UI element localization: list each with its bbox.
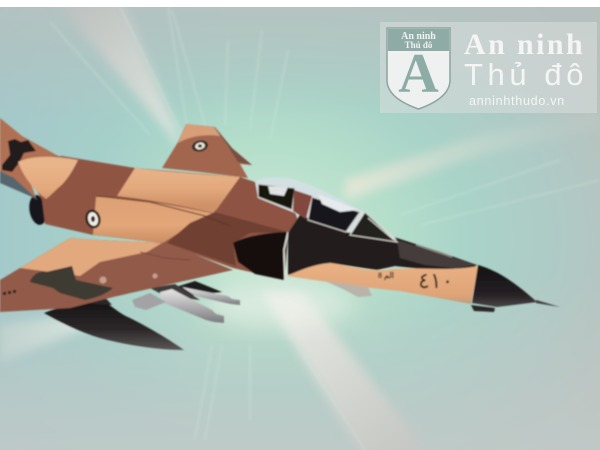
fuselage base silhouette xyxy=(20,156,300,280)
upper fuselage tan xyxy=(117,168,245,213)
logo wordmark: Thủ đô xyxy=(464,57,588,92)
logo shield: A xyxy=(398,43,439,105)
under nose fairing xyxy=(325,281,372,297)
tail fin xyxy=(0,118,65,200)
nose markings: ٤١٠ xyxy=(418,268,453,293)
drop tank under wing xyxy=(44,299,184,350)
dark intake xyxy=(233,232,288,280)
spine marking xyxy=(416,245,452,257)
logo wordmark: An ninh xyxy=(464,28,585,61)
intake lip xyxy=(284,232,288,280)
logo wordmark: anninhthudo.vn xyxy=(469,94,565,108)
canopy xyxy=(255,177,397,242)
brown upper band behind canopy xyxy=(217,177,300,234)
logo shield xyxy=(387,28,450,109)
fuselage panel line xyxy=(97,196,230,226)
logo shield: An ninh xyxy=(401,31,436,42)
rear fuselage tan xyxy=(18,157,78,199)
nose markings: 8 الم xyxy=(378,271,394,281)
lower nose tan xyxy=(287,263,478,304)
brown mid fuselage xyxy=(167,212,288,266)
wing xyxy=(0,238,233,312)
logo shield: Thủ đô xyxy=(405,40,433,50)
radome xyxy=(472,265,537,307)
logo: An ninh Thủ đô watermark panel xyxy=(380,22,597,113)
engine nozzle xyxy=(27,194,49,226)
vertical stabilizer xyxy=(162,124,252,178)
missiles under wing xyxy=(74,281,240,323)
nose markings xyxy=(378,268,453,293)
forward fuselage dark xyxy=(288,215,477,275)
logo wordmark xyxy=(464,28,588,108)
fuselage roundel xyxy=(83,208,103,230)
side fuselage tan xyxy=(93,197,215,243)
fighter jet xyxy=(0,118,560,350)
pitot probe xyxy=(536,300,560,307)
